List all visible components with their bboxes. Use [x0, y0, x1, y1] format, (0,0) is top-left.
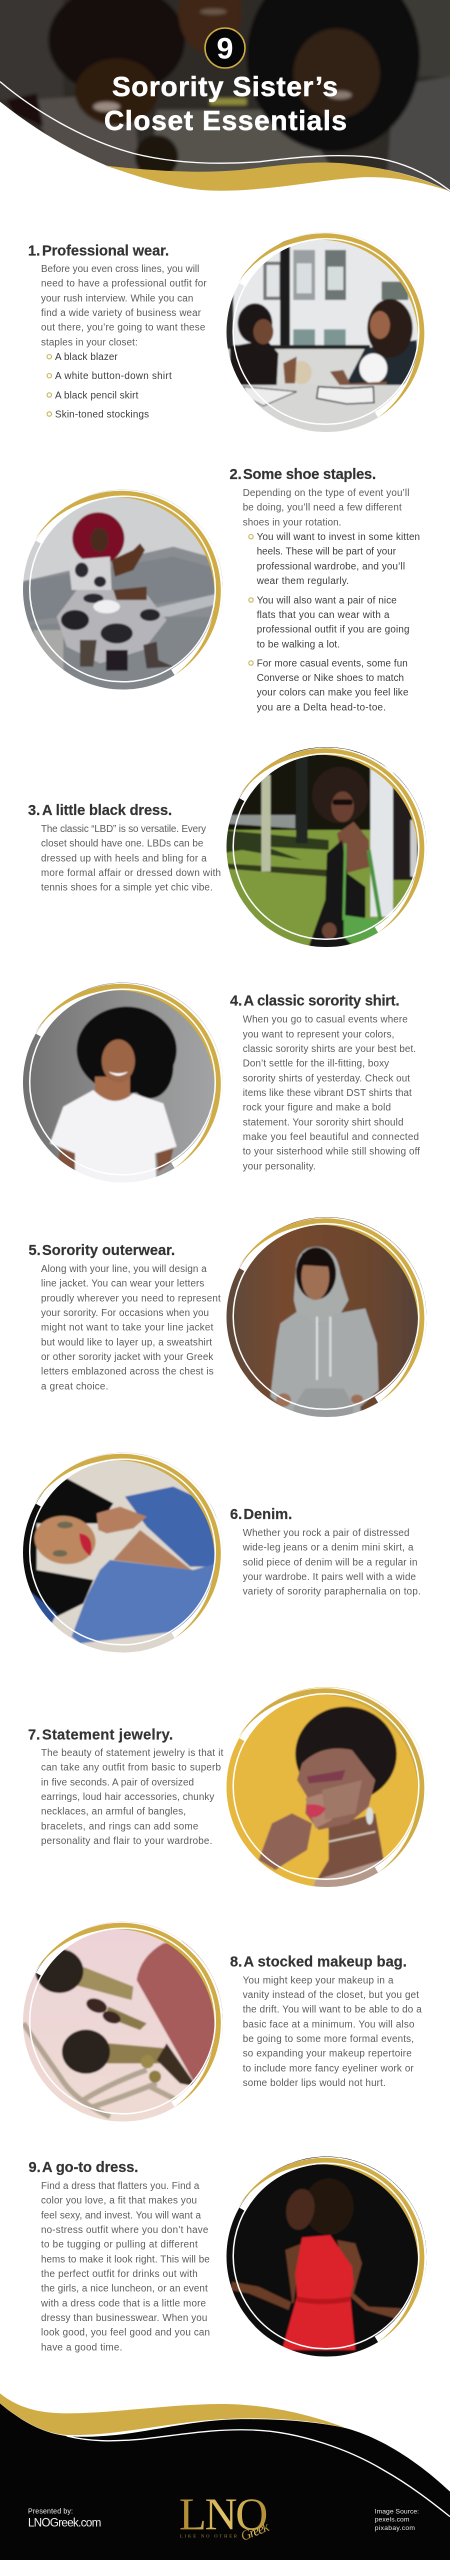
body text: You might keep your makeup in a: [243, 1975, 394, 1986]
body text: line jacket. You can wear your letters: [41, 1279, 204, 1290]
body text: feel sexy, and invest. You will want a: [41, 2210, 202, 2221]
body text: look good, you feel good and you can: [41, 2328, 210, 2339]
body text: [242, 1528, 421, 1598]
body text: color you love, a fit that makes you: [41, 2196, 197, 2207]
body text: might not want to take your line jacket: [41, 1323, 214, 1334]
bullet list: heels. These will be part of your: [257, 547, 397, 558]
body text: classic sorority shirts are your best bet.: [243, 1044, 416, 1055]
body text: [41, 1748, 224, 1847]
bullet list: professional outfit if you are going: [257, 625, 409, 636]
body text: statement. Your sorority shirt should: [243, 1117, 403, 1128]
heading: 6.: [230, 1507, 242, 1523]
bullet list: For more casual events, some fun: [257, 658, 408, 669]
heading: 5.: [28, 1243, 41, 1259]
body text: The beauty of statement jewelry is that it: [41, 1748, 224, 1759]
bullet list: [47, 352, 172, 420]
panel: statement jewelry: [28, 1687, 426, 1887]
photo: woman in black dress on grass: [226, 747, 426, 947]
body text: [243, 1975, 422, 2089]
image source: [375, 2508, 419, 2532]
body text: [41, 1264, 221, 1392]
bullet list: A black blazer: [55, 352, 118, 363]
body text: Along with your line, you will design a: [41, 1264, 207, 1275]
image source: pixabay.com: [375, 2525, 415, 2532]
body text: but would like to layer up, a sweatshirt: [41, 1337, 212, 1348]
logo: LIKE NO OTHER: [180, 2533, 238, 2538]
footer: [0, 2393, 450, 2560]
body text: to include more fancy eyeliner work or: [243, 2063, 414, 2074]
body text: shoes in your rotation.: [243, 517, 341, 528]
heading: 3.: [28, 803, 40, 819]
bullet list: professional wardrobe, and you’ll: [257, 561, 405, 572]
footer gold wave: [0, 2393, 347, 2435]
body text: be going to some more formal events,: [243, 2034, 414, 2045]
photo: interview at a table: [226, 232, 424, 432]
body text: vanity instead of the closet, but you get: [243, 1990, 419, 2001]
body text: Find a dress that flatters you. Find a: [41, 2181, 200, 2192]
heading: A go-to dress.: [42, 2160, 138, 2176]
heading: A classic sorority shirt.: [244, 994, 400, 1010]
body text: a great choice.: [41, 1381, 108, 1392]
body text: basic face at a minimum. You will also: [243, 2019, 415, 2030]
body text: to be tugging or pulling at different: [41, 2240, 198, 2251]
header photo: [0, 0, 450, 192]
body text: Before you even cross lines, you will: [41, 264, 199, 275]
gold wave: [105, 163, 448, 191]
body text: have a good time.: [41, 2342, 122, 2353]
bullet list: your colors can make you feel like: [257, 688, 409, 699]
body text: bracelets, and rings can add some: [41, 1821, 199, 1832]
panel: professional wear: [28, 232, 424, 432]
photo: woman in red dress on black: [226, 2156, 426, 2356]
number badge: 9: [217, 32, 233, 66]
body text: your personality.: [243, 1161, 316, 1172]
body text: Don’t settle for the ill-fitting, boxy: [243, 1059, 389, 1070]
photo: makeup brushes and rose clutch: [23, 1922, 223, 2122]
photo: smiling woman in white tee: [23, 982, 223, 1182]
photo: woman in floral dress on steps: [23, 490, 223, 690]
bullet list: You will want to invest in some kitten: [257, 532, 420, 543]
panel: stocked makeup bag: [23, 1922, 422, 2122]
body text: more formal affair or dressed down with: [41, 868, 221, 879]
body text: letters emblazoned across the chest is: [41, 1367, 214, 1378]
body text: in five seconds. A pair of oversized: [41, 1777, 194, 1788]
bullet list: you are a Delta head-to-toe.: [257, 702, 386, 713]
body text: hems to make it look right. This will be: [41, 2254, 210, 2265]
white wave line: [0, 82, 450, 191]
body text: wide-leg jeans or a denim mini skirt, a: [242, 1543, 414, 1554]
body text: necklaces, an armful of bangles,: [41, 1807, 186, 1818]
title: Sorority Sister’s: [112, 71, 338, 102]
body text: [41, 264, 207, 348]
body text: earrings, loud hair accessories, chunky: [41, 1792, 214, 1803]
bullet list: Skin-toned stockings: [55, 409, 149, 420]
body text: your sorority. For occasions when you: [41, 1308, 209, 1319]
number badge: [205, 28, 245, 68]
heading: Denim.: [244, 1507, 292, 1523]
heading: 2.: [230, 467, 242, 483]
bullet list: A black pencil skirt: [55, 390, 139, 401]
body text: tennis shoes for a simple yet chic vibe.: [41, 883, 213, 894]
body text: find a wide variety of business wear: [41, 308, 202, 319]
heading: 4.: [230, 994, 242, 1010]
panel: go-to dress: [28, 2156, 426, 2356]
logo: Greek: [239, 2520, 272, 2545]
header banner: [0, 0, 450, 192]
bullet list: to be walking a lot.: [257, 639, 340, 650]
heading: 8.: [230, 1955, 242, 1971]
body text: out there, you’re going to want these: [41, 323, 206, 334]
body text: need to have a professional outfit for: [41, 279, 207, 290]
body text: be doing, you’ll need a few different: [243, 503, 402, 514]
bullet list: flats that you can wear with a: [257, 610, 390, 621]
body text: your rush interview. While you can: [41, 293, 193, 304]
body text: the girls, a nice luncheon, or an event: [41, 2284, 208, 2295]
heading: Professional wear.: [42, 244, 169, 260]
heading: Sorority outerwear.: [42, 1243, 175, 1259]
body text: staples in your closet:: [41, 337, 138, 348]
heading: 7.: [28, 1727, 40, 1743]
body text: so expanding your makeup repertoire: [243, 2049, 412, 2060]
body text: proudly wherever you need to represent: [41, 1293, 221, 1304]
photo: woman with afro and earrings on yellow: [226, 1687, 426, 1887]
heading: Some shoe staples.: [243, 467, 376, 483]
heading: A stocked makeup bag.: [244, 1955, 407, 1971]
body text: with a dress code that is a little more: [40, 2298, 207, 2309]
body text: [243, 1015, 420, 1172]
body text: the perfect outfit for drinks out with: [41, 2269, 198, 2280]
heading: A little black dress.: [42, 803, 172, 819]
body text: [243, 488, 409, 528]
photo: woman in grey hoodie: [226, 1217, 426, 1417]
footer black wave: [0, 2403, 450, 2560]
body text: items like these vibrant DST shirts that: [243, 1088, 412, 1099]
body text: [41, 824, 221, 894]
presented by: Presented by:: [28, 2508, 73, 2515]
body text: closet should have one. LBDs can be: [41, 839, 204, 850]
presented by: LNOGreek.com: [28, 2518, 101, 2530]
heading: 9.: [28, 2160, 41, 2176]
image source: pexels.com: [375, 2517, 410, 2524]
panel: sorority outerwear: [28, 1217, 426, 1417]
body text: or other sorority jacket with your Greek: [41, 1352, 213, 1363]
bullet list: Converse or Nike shoes to match: [257, 673, 404, 684]
panel: shoe staples: [13, 467, 420, 713]
body text: the drift. You will want to be able to do a: [243, 2005, 422, 2016]
body text: solid piece of denim will be a regular in: [243, 1557, 417, 1568]
footer white wave line: [67, 2430, 450, 2517]
body text: [40, 2181, 210, 2353]
body text: rock your figure and make a bold: [243, 1103, 391, 1114]
body text: you want to represent your colors,: [243, 1029, 394, 1040]
heading: Statement jewelry.: [42, 1727, 173, 1743]
title: Closet Essentials: [104, 105, 347, 136]
body text: your wardrobe. It pairs well with a wide: [243, 1572, 417, 1583]
body text: variety of sorority paraphernalia on top.: [243, 1587, 421, 1598]
body text: Depending on the type of event you’ll: [243, 488, 409, 499]
body text: to your sisterhood while still showing off: [243, 1147, 420, 1158]
body text: Whether you rock a pair of distressed: [243, 1528, 409, 1539]
body text: make you feel beautiful and connected: [243, 1132, 419, 1143]
bullet list: wear them regularly.: [256, 576, 349, 587]
panel: denim: [23, 1452, 420, 1652]
body text: dressy than businesswear. When you: [41, 2313, 207, 2324]
bullet list: You will also want a pair of nice: [257, 595, 397, 606]
body text: some bolder lips would not hurt.: [243, 2078, 386, 2089]
panel: classic sorority shirt: [23, 982, 420, 1182]
panel: little black dress: [28, 747, 426, 947]
bullet list: [249, 532, 420, 713]
bullet list: A white button-down shirt: [55, 371, 172, 382]
body text: no-stress outfit where you don’t have: [41, 2225, 209, 2236]
title: [104, 71, 347, 136]
body text: dressed up with heels and bling for a: [41, 853, 207, 864]
body text: When you go to casual events where: [243, 1015, 408, 1026]
body text: can take any outfit from basic to superb: [41, 1763, 222, 1774]
heading: 1.: [28, 244, 40, 260]
body text: personality and flair to your wardrobe.: [41, 1836, 212, 1847]
body text: The classic “LBD” is so versatile. Every: [41, 824, 206, 835]
photo: woman in denim shirt lying down: [23, 1452, 223, 1652]
logo: LNO: [179, 2489, 268, 2539]
presented by: [28, 2508, 101, 2530]
body text: sorority shirts of yesterday. Check out: [243, 1073, 410, 1084]
image source: Image Source:: [375, 2508, 419, 2515]
